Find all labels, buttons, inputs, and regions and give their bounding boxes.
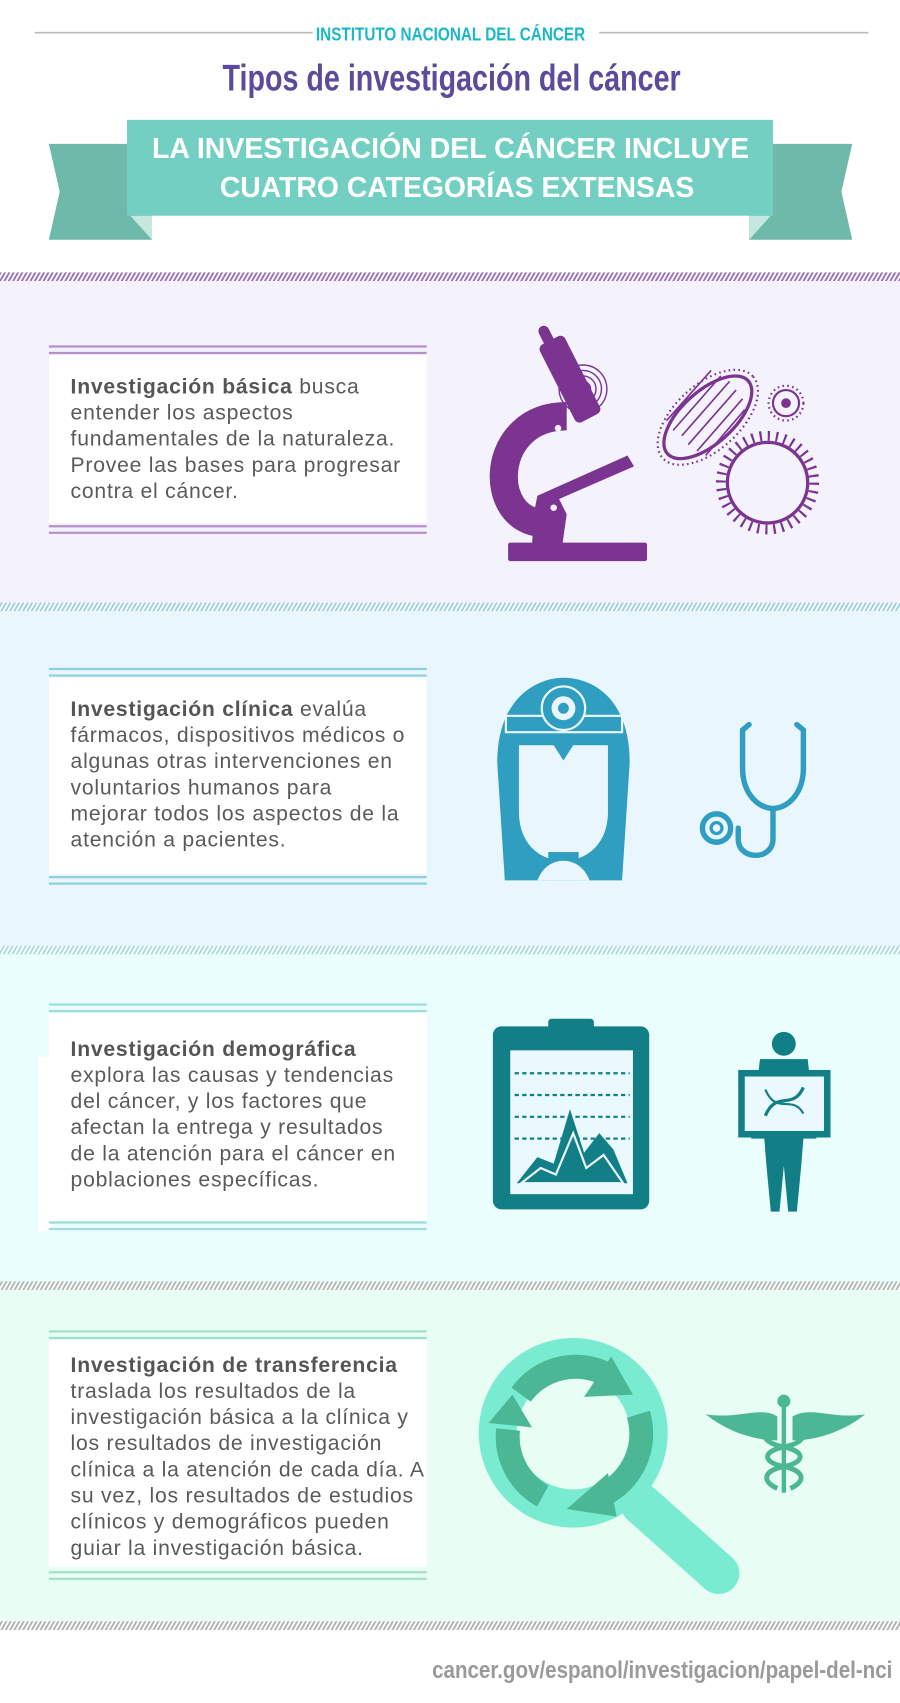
- panel: clinical research: atención a pacientes.: [71, 829, 286, 852]
- panel: translational research: guiar la investigación básica.: [71, 1537, 364, 1560]
- panel: basic research: fundamentales de la naturaleza.: [71, 428, 395, 451]
- title: Tipos de investigación del cáncer: [223, 57, 681, 98]
- icon: stethoscope: [702, 725, 803, 855]
- icon: clipboard chart: [493, 1019, 649, 1209]
- panel: demographic research: de la atención para el cáncer en: [71, 1142, 396, 1165]
- text: demographic: Investigación demográfica: [71, 1038, 356, 1061]
- panel: basic research: contra el cáncer.: [71, 480, 239, 503]
- panel: demographic research: poblaciones específicas.: [71, 1169, 319, 1192]
- panel: clinical research: voluntarios humanos para: [71, 776, 332, 799]
- panel: translational research: clínica a la atención de cada día. A: [71, 1458, 425, 1481]
- icon: caduceus: [706, 1395, 865, 1493]
- panel: basic research: Provee las bases para progresar: [71, 454, 401, 477]
- panel: clinical research: [0, 603, 900, 946]
- footer stripe: [0, 1621, 900, 1630]
- banner: CUATRO CATEGORÍAS EXTENSAS: [220, 171, 694, 203]
- panel: translational research: su vez, los resultados de estudios: [71, 1484, 414, 1508]
- icon: magnifier with arrows: [479, 1338, 719, 1573]
- panel: clinical research: fármacos, dispositivos médicos o: [71, 724, 405, 747]
- text: basic: Investigación básica busca: [71, 375, 360, 398]
- icon: human figure: [738, 1032, 831, 1212]
- panel: clinical research: algunas otras intervenciones en: [71, 750, 393, 773]
- banner: [49, 120, 852, 240]
- panel: basic research: entender los aspectos: [71, 401, 293, 424]
- text: clinical: Investigación clínica evalúa: [71, 698, 367, 721]
- text: translational: Investigación de transferencia: [71, 1354, 398, 1377]
- panel: demographic research: explora las causas y tendencias: [71, 1064, 394, 1087]
- icon: cells: [641, 352, 814, 530]
- panel: translational research: [0, 1281, 900, 1621]
- panel: translational research: clínicos y demográficos pueden: [71, 1511, 390, 1534]
- panel: translational research: los resultados de investigación: [71, 1432, 382, 1455]
- icon: microscope: [504, 324, 647, 561]
- banner: LA INVESTIGACIÓN DEL CÁNCER INCLUYE: [152, 132, 749, 164]
- organization name: INSTITUTO NACIONAL DEL CÁNCER: [316, 23, 585, 44]
- panel: translational research: traslada los resultados de la: [71, 1380, 356, 1403]
- panel: clinical research: mejorar todos los aspectos de la: [71, 802, 399, 825]
- panel: translational research: investigación básica a la clínica y: [71, 1406, 409, 1429]
- panel: demographic research: del cáncer, y los factores que: [71, 1090, 367, 1113]
- panel: basic research: [0, 272, 900, 603]
- panel: demographic research: afectan la entrega y resultados: [71, 1116, 383, 1139]
- panel: demographic research: [0, 946, 900, 1281]
- icon: doctor: [497, 678, 630, 880]
